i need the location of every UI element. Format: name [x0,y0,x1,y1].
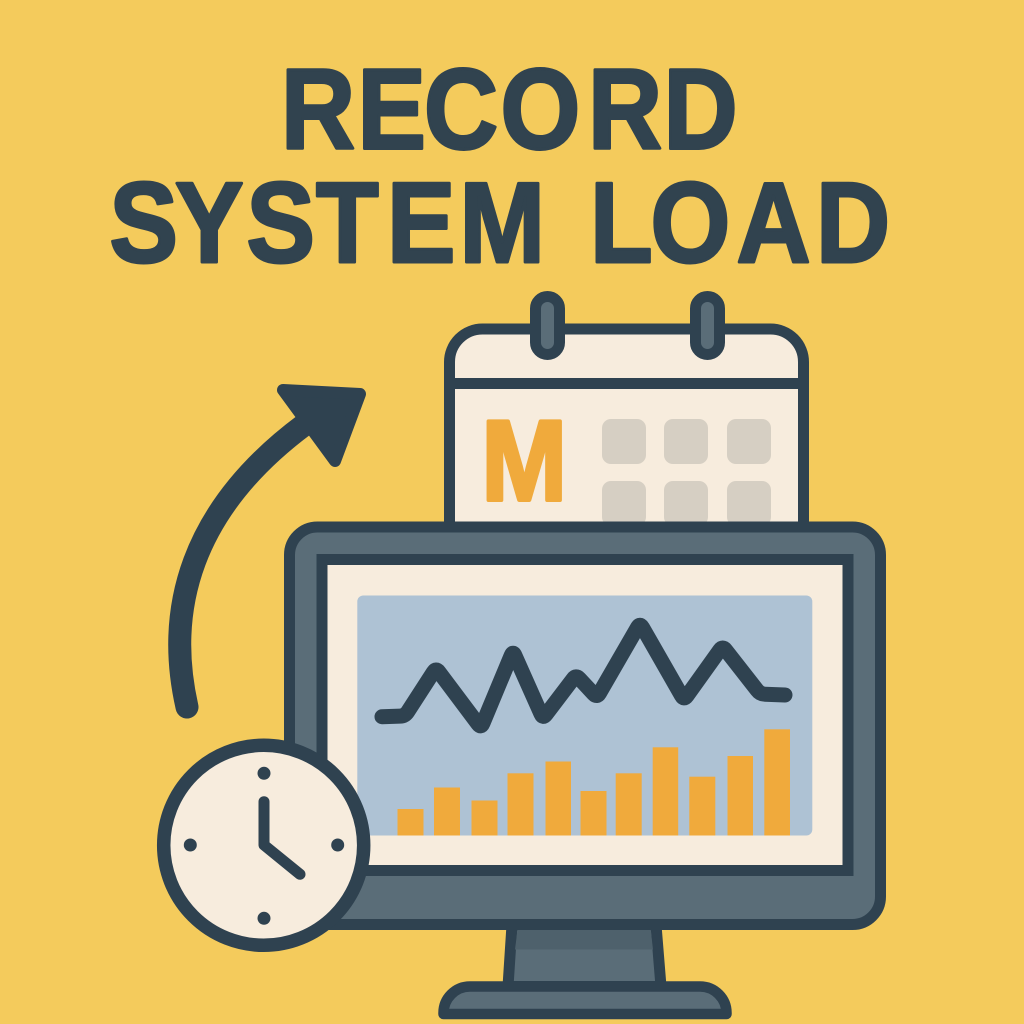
monitor [290,527,880,924]
icon: curved arrow [180,390,360,707]
chart panel [357,596,812,836]
line chart [382,625,785,726]
title [110,46,890,286]
icon: calendar [450,296,804,530]
title: SYSTEM LOAD [110,159,890,286]
title: RECORD [281,46,738,173]
bar chart [398,729,790,836]
icon: clock [164,745,364,945]
icon: calendar: M [482,397,567,524]
monitor stand [444,925,726,1014]
